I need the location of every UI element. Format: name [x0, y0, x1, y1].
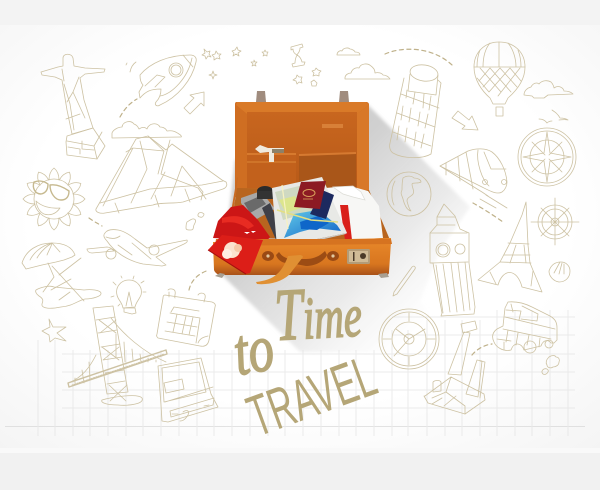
icon: Golden Gate bridge	[68, 306, 167, 405]
red scarf	[213, 205, 270, 241]
icon: train	[440, 149, 507, 208]
icon: birds	[539, 110, 568, 123]
suitcase hinges	[256, 91, 349, 102]
icon: cloud right	[524, 81, 573, 98]
icon: globe	[387, 172, 431, 216]
suitcase front	[213, 238, 392, 278]
icon: rocket	[126, 55, 196, 106]
icon: stars near suitcase	[232, 47, 321, 86]
lock	[347, 249, 370, 264]
icon: Eiffel tower	[478, 202, 542, 292]
icon: small puffs near suitcase	[186, 213, 204, 230]
notebook grid	[5, 310, 585, 436]
icon: ruined columns	[424, 321, 485, 414]
long suitcase shadow	[222, 105, 470, 352]
icon: airplane	[87, 230, 187, 266]
icon: Big Ben clock tower	[430, 204, 475, 316]
icon: hot air balloon	[474, 42, 525, 116]
word: to: to	[228, 311, 279, 389]
flight path dashes near rocket	[120, 99, 137, 117]
icon: Christ the Redeemer statue	[41, 54, 105, 159]
red wallet with flower	[208, 235, 263, 274]
icon: ship wheel	[531, 198, 579, 245]
icon: cloud top centre	[345, 64, 390, 79]
suitcase interior	[229, 188, 390, 240]
icon: leaning tower of Pisa	[390, 63, 441, 158]
icon: hourglass	[291, 44, 305, 67]
icon: pen	[393, 266, 415, 296]
tag in pocket	[255, 145, 284, 162]
flight path dashes top	[385, 49, 452, 65]
icon: exhaust puffs	[542, 356, 559, 374]
camera	[241, 186, 284, 242]
flight path dashes sun to plane	[89, 218, 102, 226]
icon: stars	[202, 49, 221, 79]
suitcase lid	[235, 102, 369, 197]
lid pockets	[247, 153, 356, 188]
icon: London double-decker bus	[493, 302, 557, 353]
flight path dashes near bus	[472, 344, 492, 355]
icon: diagonal arrow	[452, 111, 478, 130]
icon: sun with sunglasses	[23, 168, 85, 230]
side strap	[227, 177, 238, 235]
red passport	[294, 181, 326, 209]
handle and belt	[256, 251, 339, 284]
map	[272, 177, 347, 250]
blue passport	[310, 190, 334, 219]
icon: small cloud top	[337, 48, 360, 55]
icon: up arrow	[184, 92, 204, 114]
icon: calendar	[157, 289, 215, 346]
icon: cloud left	[112, 122, 181, 138]
icon: compass rose	[518, 128, 576, 186]
white shirt	[325, 186, 383, 240]
word: Time: Time	[273, 270, 364, 356]
suitcase	[208, 91, 392, 284]
icon: starfish	[42, 319, 66, 342]
icon: seashell	[549, 262, 570, 282]
icon: small suitcase	[158, 358, 218, 422]
icon: beach umbrella and deck chair	[22, 243, 101, 308]
word: TRAVEL: TRAVEL	[239, 343, 385, 449]
flight path dashes after train	[473, 203, 503, 222]
icon: pyramids	[96, 136, 227, 213]
flight path dashes calendar	[189, 270, 209, 290]
title: Time to Travel	[228, 270, 385, 449]
icon: compass dial	[379, 309, 439, 369]
icon: light bulb	[111, 276, 146, 314]
